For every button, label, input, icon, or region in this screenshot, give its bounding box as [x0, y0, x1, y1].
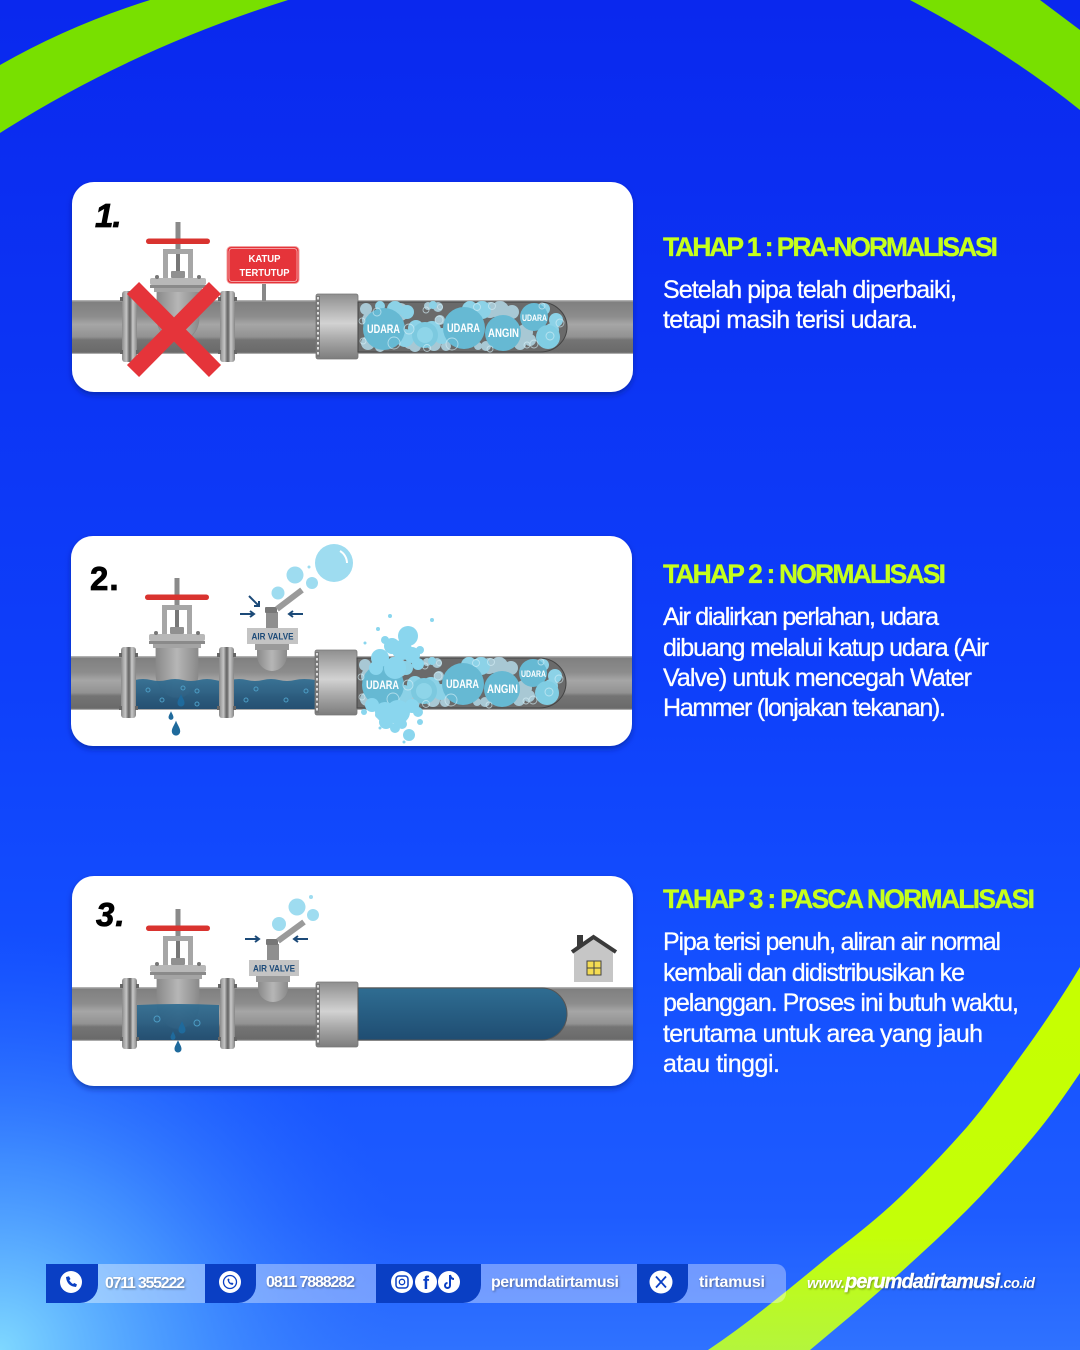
stage number 2: 2. — [90, 560, 119, 597]
air bubbles in pipe: UDARA — [366, 678, 399, 692]
pressure arrows — [240, 596, 303, 617]
description stage 3 — [663, 928, 1019, 1078]
gate valve — [120, 222, 237, 362]
text: stage 2 — [663, 559, 989, 722]
description stage 3: terutama untuk area yang jauh — [663, 1020, 983, 1048]
escaping bubbles — [272, 895, 319, 931]
description stage 2: Valve) untuk mencegah Water — [663, 664, 972, 692]
text: stage 3 — [663, 884, 1035, 1078]
air bubbles in pipe: UDARA — [521, 669, 546, 679]
air bubbles in pipe: UDARA — [446, 677, 479, 691]
bubble burst — [361, 614, 434, 744]
air bubbles in pipe: ANGIN — [487, 682, 518, 696]
description stage 2 — [663, 603, 989, 722]
sign: katup tertutup — [227, 246, 299, 301]
air bubbles in pipe: UDARA — [522, 313, 547, 323]
pressure arrows — [245, 936, 308, 942]
card 2 background — [71, 536, 632, 746]
red cross — [133, 288, 215, 371]
flanges — [119, 647, 236, 718]
icon: house — [572, 935, 616, 982]
contact: x — [637, 1264, 786, 1303]
air bubbles in pipe — [358, 301, 567, 352]
footer contact bar — [46, 1264, 1036, 1303]
coupling — [316, 294, 358, 359]
description stage 1 — [663, 276, 957, 334]
panel: stage 2 illustration — [71, 536, 632, 746]
air valve: AIR VALVE — [252, 632, 294, 642]
description stage 2: dibuang melalui katup udara (Air — [663, 634, 989, 662]
pipe — [72, 300, 633, 354]
stage number 3: 3. — [96, 896, 125, 933]
website url: perumdatirtamusi — [844, 1271, 1000, 1293]
pipe — [72, 987, 633, 1041]
air valve — [247, 590, 302, 671]
contact: phone: 0711 355222 — [105, 1275, 185, 1292]
sign: katup tertutup: KATUP — [248, 254, 281, 265]
contact: social media: perumdatirtamusi — [491, 1274, 619, 1291]
description stage 1: tetapi masih terisi udara. — [663, 306, 918, 334]
contact: whatsapp — [205, 1264, 376, 1303]
air valve — [249, 922, 304, 1002]
description stage 3: kembali dan didistribusikan ke — [663, 959, 965, 987]
gate valve body — [146, 909, 210, 1029]
description stage 2: Air dialirkan perlahan, udara — [663, 603, 939, 631]
website url — [807, 1271, 1036, 1293]
air bubbles in pipe — [357, 614, 566, 744]
water in pipe — [135, 679, 316, 709]
air bubbles in pipe: UDARA — [367, 322, 400, 336]
contact: social media — [376, 1264, 637, 1303]
water filled pipe — [358, 988, 567, 1040]
arc: top right green band — [910, 0, 1080, 110]
escaping bubbles — [272, 544, 353, 600]
description stage 3: pelanggan. Proses ini butuh waktu, — [663, 989, 1019, 1017]
website url: www. — [807, 1275, 845, 1292]
air valve: AIR VALVE — [253, 964, 295, 974]
gate valve body — [145, 578, 209, 698]
sign: katup tertutup: TERTUTUP — [240, 268, 290, 279]
contact: phone — [46, 1264, 205, 1303]
contact: x: tirtamusi — [699, 1274, 765, 1291]
water ring bubbles — [146, 686, 308, 706]
arc: bottom right lime band — [708, 967, 1080, 1350]
stage number 1: 1. — [95, 197, 122, 234]
water ring bubbles — [154, 1016, 200, 1026]
water droplets — [169, 694, 184, 736]
description stage 3: atau tinggi. — [663, 1050, 780, 1078]
text: stage 1 — [663, 232, 998, 334]
panel: stage 1 illustration — [72, 182, 633, 392]
pipe — [71, 656, 632, 710]
air bubbles in pipe: ANGIN — [488, 326, 519, 340]
coupling — [315, 650, 357, 715]
description stage 1: Setelah pipa telah diperbaiki, — [663, 276, 957, 304]
panel: stage 3 illustration — [72, 876, 633, 1086]
water droplets — [171, 1021, 186, 1052]
description stage 2: Hammer (lonjakan tekanan). — [663, 694, 946, 722]
coupling — [316, 982, 358, 1047]
description stage 3: Pipa terisi penuh, aliran air normal — [663, 928, 1001, 956]
air bubbles in pipe: UDARA — [447, 321, 480, 335]
flanges — [120, 978, 237, 1049]
contact: whatsapp: 0811 7888282 — [266, 1274, 355, 1291]
card 3 background — [72, 876, 633, 1086]
contact: social media: f — [423, 1273, 430, 1293]
card 1 background — [72, 182, 633, 392]
water in valve section — [137, 1004, 219, 1040]
heading stage 2: TAHAP 2 : NORMALISASI — [663, 559, 946, 589]
heading stage 3: TAHAP 3 : PASCA NORMALISASI — [663, 884, 1035, 914]
heading stage 1: TAHAP 1 : PRA-NORMALISASI — [663, 232, 998, 262]
website url: .co.id — [1000, 1276, 1036, 1292]
arc: top left green band — [0, 0, 288, 133]
